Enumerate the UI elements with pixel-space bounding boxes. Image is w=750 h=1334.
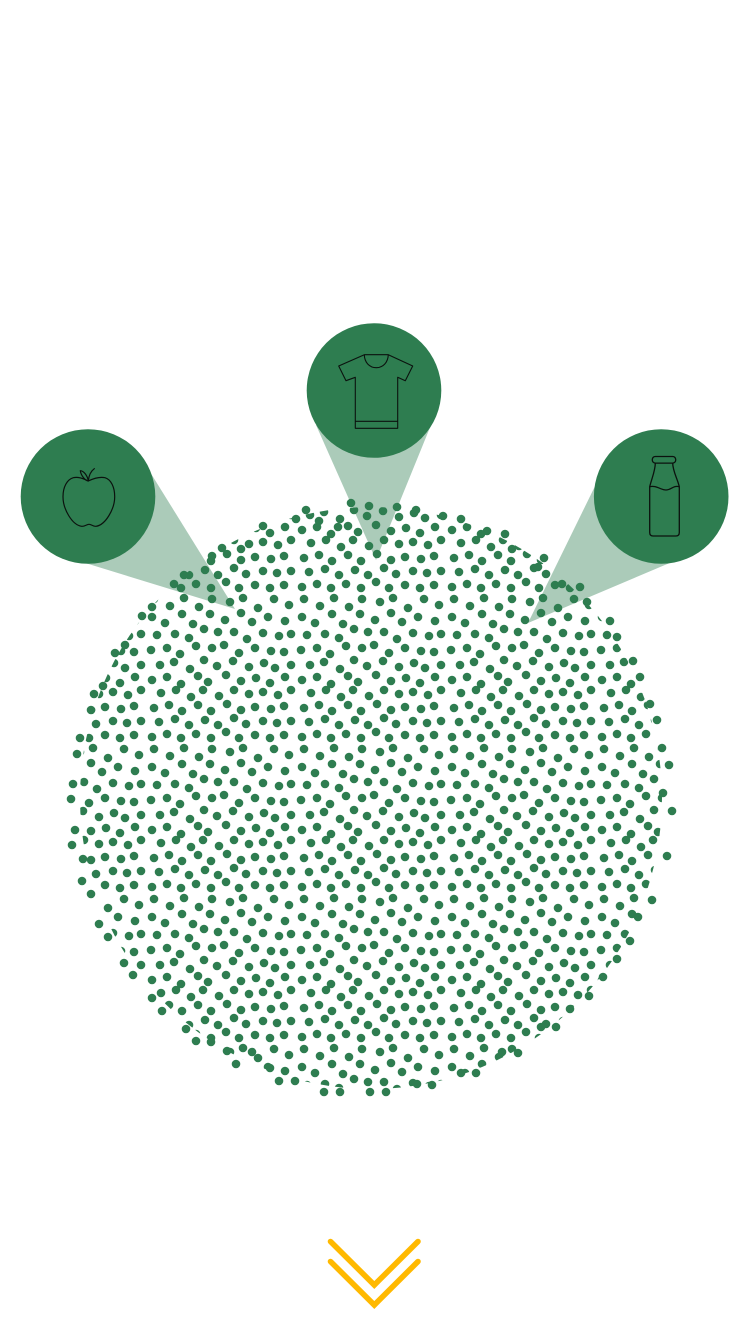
circle: bottle — [594, 429, 728, 564]
interior dots — [70, 500, 680, 1100]
beam: apple — [82, 472, 235, 609]
perimeter dots — [71, 503, 672, 1092]
circle: apple — [21, 429, 155, 564]
icon: apple — [63, 468, 115, 526]
arrow: double chevron — [330, 1242, 418, 1305]
icon: t-shirt — [339, 355, 413, 428]
beam: t-shirt — [316, 425, 431, 560]
icon: bottle — [650, 456, 679, 536]
circle: t-shirt — [307, 323, 441, 458]
beam: bottle — [528, 478, 672, 623]
dot cloud — [70, 500, 680, 1100]
infographic canvas — [20, 323, 728, 1309]
